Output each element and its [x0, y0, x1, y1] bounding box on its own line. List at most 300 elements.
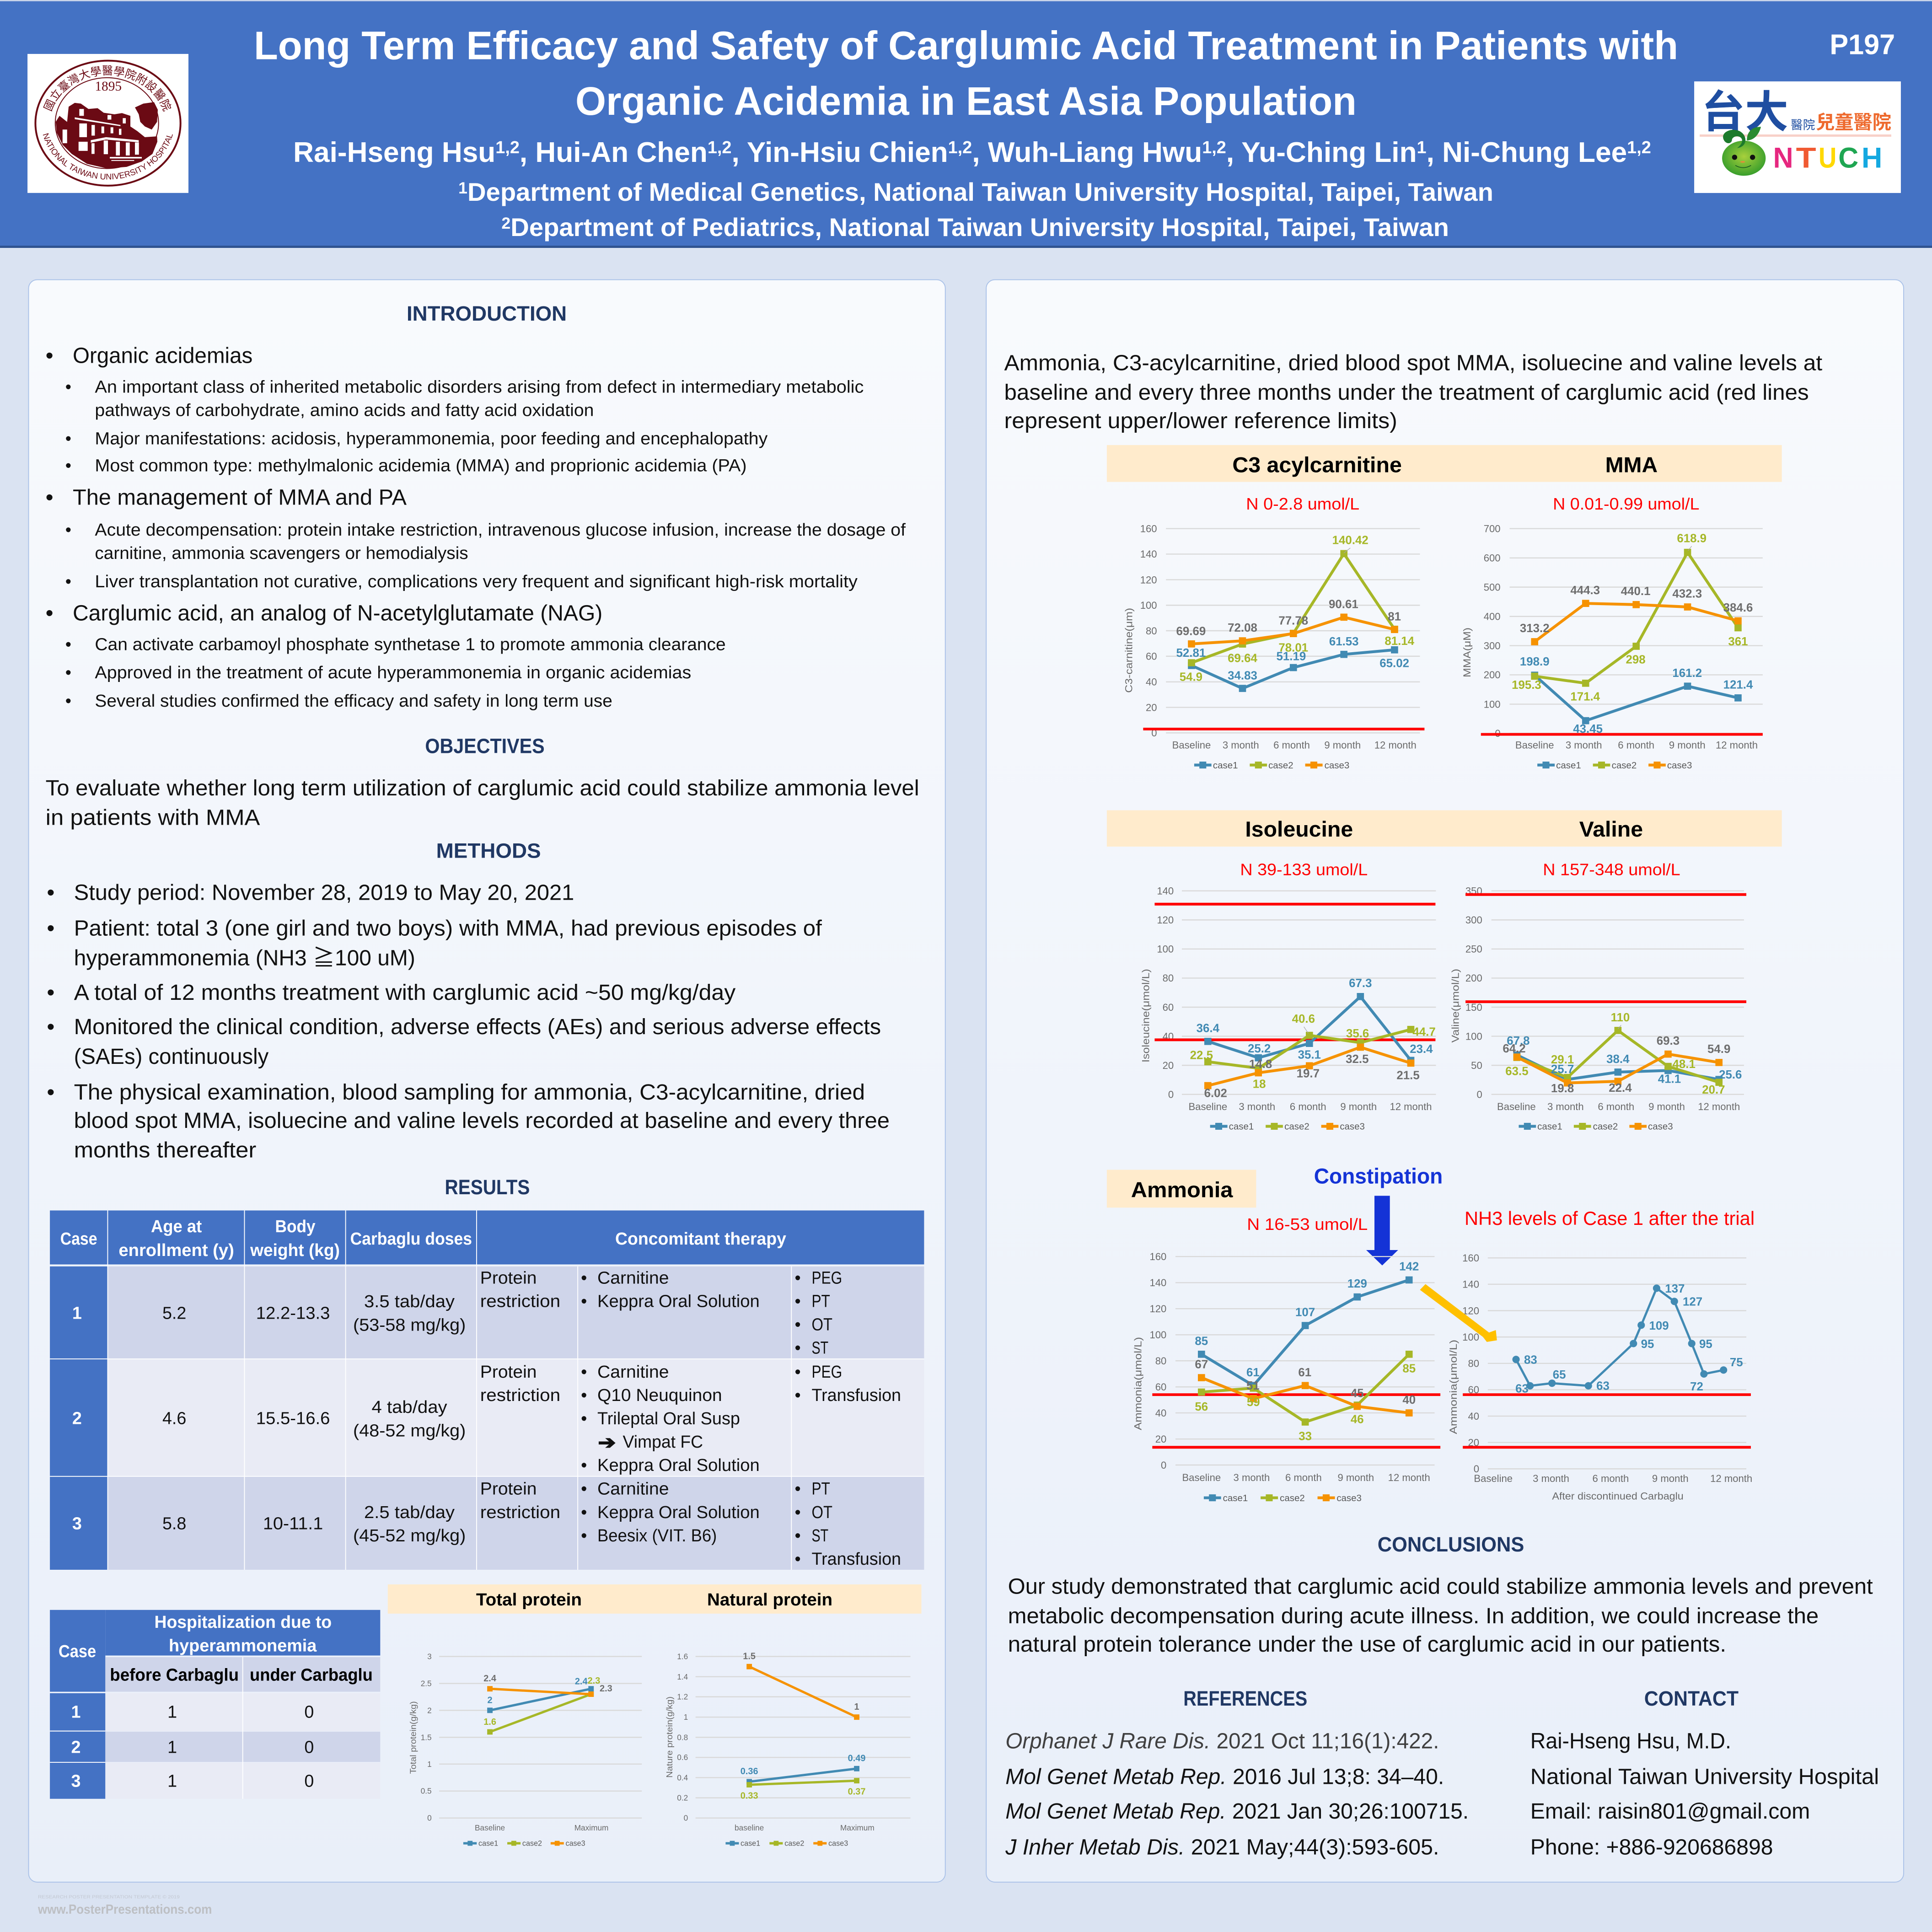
chart: MMA: 195.3 — [1512, 679, 1541, 692]
authors: , Hui-An Chen — [520, 137, 708, 168]
chart: C3 acylcarnitine: 20 — [1146, 702, 1157, 713]
chart: C3 acylcarnitine: 81 — [1388, 611, 1401, 623]
text block: methods bullets: • — [47, 916, 54, 941]
chart: NH3 of case 1 after the trial: 0 — [1474, 1463, 1479, 1475]
chart: C3 acylcarnitine: 90.61 — [1329, 598, 1358, 611]
chart: isoleucine: 80 — [1163, 972, 1174, 984]
chart: total protein — [408, 1652, 642, 1847]
chart: natural protein: 0.36 — [741, 1766, 758, 1776]
text block: methods bullets — [47, 880, 890, 1163]
chart: MMA: 440.1 — [1621, 585, 1650, 598]
band: ammonia: Ammonia — [1131, 1177, 1233, 1202]
chart: ammonia — [1132, 1251, 1440, 1503]
chart: valine: 110 — [1611, 1011, 1630, 1024]
chart: valine: 25.6 — [1719, 1068, 1742, 1081]
authors: , Wuh-Liang Hwu — [972, 137, 1202, 168]
chart: isoleucine: 3 month — [1239, 1101, 1275, 1112]
table row: case 3: • — [795, 1549, 801, 1568]
table: hospitalization due to hyperammonemia: under Carbaglu — [250, 1665, 373, 1684]
reference range: isoleucine: N 39-133 umol/L — [1240, 860, 1368, 879]
table row: case 2: Trileptal Oral Susp — [597, 1409, 740, 1428]
table: hospitalization due to hyperammonemia: Case — [59, 1642, 96, 1661]
table: hospitalization due to hyperammonemia: 0 — [304, 1702, 314, 1722]
reference range: valine: N 157-348 umol/L — [1543, 860, 1680, 879]
chart: ammonia: 6 month — [1285, 1472, 1322, 1483]
chart: MMA: 500 — [1484, 581, 1501, 593]
heading: contact: CONTACT — [1644, 1687, 1739, 1710]
chart: MMA: 171.4 — [1570, 691, 1600, 703]
text block: methods bullets: • — [47, 980, 54, 1005]
table row: case 2: ➔ — [598, 1431, 616, 1453]
text block: methods bullets: months thereafter — [74, 1138, 256, 1163]
affiliations: 1 — [458, 179, 467, 197]
chart: valine: 12 month — [1698, 1101, 1740, 1112]
chart: ammonia: 61 — [1298, 1366, 1311, 1379]
logo: NTUCH children's hospital: 醫院 — [1791, 118, 1815, 132]
chart: MMA: 700 — [1484, 523, 1501, 534]
table row: case 2: Carnitine — [597, 1362, 669, 1381]
table row: case 1: 5.2 — [162, 1303, 186, 1322]
chart: isoleucine: Isoleucine(μmol/L) — [1140, 969, 1152, 1063]
chart: ammonia: 9 month — [1337, 1472, 1374, 1483]
logo: National Taiwan University Hospital seal: NATIONAL TAIWAN UNIVERSITY HOSPITAL — [41, 132, 175, 182]
chart: C3 acylcarnitine: 3 month — [1223, 740, 1259, 751]
chart: MMA: 384.6 — [1723, 601, 1753, 614]
chart: C3 acylcarnitine: 160 — [1140, 523, 1157, 534]
logo: NTUCH children's hospital: 台大 — [1701, 88, 1788, 137]
chart: isoleucine: 18 — [1253, 1078, 1266, 1090]
chart: valine: 25.7 — [1551, 1063, 1574, 1076]
chart: valine: 250 — [1465, 944, 1482, 955]
chart: NH3 of case 1 after the trial: 9 month — [1652, 1473, 1689, 1484]
legend: case2 — [1280, 1493, 1305, 1503]
chart: total protein: 3 — [427, 1652, 432, 1661]
text block: introduction bullets: • — [46, 343, 54, 368]
table row: case 2: 15.5-16.6 — [256, 1408, 330, 1428]
table row: case 3: Carnitine — [597, 1479, 669, 1498]
chart: natural protein: 1 — [854, 1702, 859, 1712]
chart: natural protein: 1.2 — [677, 1692, 688, 1701]
legend: case1 — [1556, 760, 1581, 771]
chart: isoleucine: 35.1 — [1298, 1048, 1321, 1061]
footer template credit: www.PosterPresentations.com — [38, 1902, 212, 1916]
table row: case 3: • — [581, 1479, 587, 1498]
chart: MMA: MMA(μM) — [1461, 628, 1473, 677]
chart: ammonia: 33 — [1299, 1430, 1312, 1443]
chart: C3 acylcarnitine: 78.01 — [1278, 641, 1308, 654]
table row: case 1: (53-58 mg/kg) — [353, 1315, 466, 1335]
table: hospitalization due to hyperammonemia: 1 — [167, 1702, 177, 1722]
table row: case 1: Carnitine — [597, 1268, 669, 1287]
chart: MMA: 600 — [1484, 553, 1501, 564]
chart: valine: 9 month — [1648, 1101, 1685, 1112]
text block: introduction bullets: • — [65, 572, 71, 591]
table header: Age at — [151, 1217, 202, 1236]
chart: MMA: 400 — [1484, 611, 1501, 623]
text block: conclusions: Our study demonstrated that carglumic acid could stabilize ammonia levels and prevent — [1008, 1574, 1873, 1599]
chart: NH3 of case 1 after the trial: 160 — [1462, 1252, 1479, 1264]
chart: isoleucine: 120 — [1157, 914, 1174, 926]
chart: ammonia: 12 month — [1388, 1472, 1430, 1483]
table: hospitalization due to hyperammonemia: 1 — [167, 1737, 177, 1756]
table row: case 3: OT — [811, 1503, 832, 1522]
text block: introduction bullets: Organic acidemias — [73, 343, 252, 368]
table header: Case — [60, 1229, 97, 1248]
chart: total protein: 2.3 — [600, 1684, 612, 1694]
callout: constipation: Constipation — [1314, 1164, 1443, 1188]
chart: total protein: 2.3 — [588, 1676, 600, 1686]
chart: C3 acylcarnitine: 140.42 — [1332, 534, 1368, 547]
table row: case 2: Transfusion — [811, 1385, 901, 1405]
arrow: constipation marker — [1366, 1196, 1398, 1266]
legend: case2 — [1593, 1122, 1618, 1132]
band: total and natural protein: Total protein — [476, 1590, 582, 1609]
legend: case3 — [1325, 760, 1349, 771]
chart: ammonia: 67 — [1195, 1358, 1208, 1371]
chart: valine: 50 — [1471, 1060, 1482, 1071]
title: Organic Acidemia in East Asia Population — [575, 79, 1357, 123]
table: hospitalization due to hyperammonemia: 3 — [71, 1771, 80, 1790]
chart: MMA: 12 month — [1716, 740, 1758, 751]
band: isoleucine and valine: Valine — [1579, 817, 1643, 841]
table row: case 1: • — [795, 1315, 801, 1334]
reference range: ammonia: N 16-53 umol/L — [1247, 1215, 1368, 1234]
chart: natural protein: 0.4 — [677, 1773, 688, 1782]
legend: case2 — [1612, 760, 1637, 771]
band: C3 acylcarnitine and MMA — [1107, 445, 1782, 482]
chart: NH3 of case 1 after the trial: 60 — [1468, 1384, 1479, 1395]
text block: introduction bullets: • — [65, 691, 71, 710]
chart: valine: 54.9 — [1707, 1043, 1730, 1056]
text block: introduction bullets: • — [65, 520, 71, 539]
table row: case 3: • — [581, 1526, 587, 1545]
table row: case 3: • — [795, 1479, 801, 1498]
chart: valine: 41.1 — [1658, 1073, 1681, 1086]
text block: objectives: in patients with MMA — [46, 805, 260, 830]
chart: isoleucine: 67.3 — [1349, 977, 1372, 990]
chart: C3 acylcarnitine: 52.81 — [1176, 647, 1206, 660]
chart: C3 acylcarnitine: 69.64 — [1228, 652, 1257, 665]
chart: natural protein — [665, 1652, 911, 1847]
legend: case2 — [1268, 760, 1293, 771]
chart: MMA: 121.4 — [1723, 678, 1753, 691]
chart: ammonia: 20 — [1155, 1433, 1166, 1445]
chart: NH3 of case 1 after the trial: Baseline — [1474, 1473, 1513, 1484]
chart: MMA: 444.3 — [1570, 584, 1600, 597]
chart: natural protein: Nature protein(g/kg) — [665, 1696, 674, 1778]
table row: case 2: • — [581, 1385, 587, 1405]
table row: case 3: 10-11.1 — [263, 1514, 323, 1533]
text block: references: Mol Genet Metab Rep. 2016 Jul 13;8: 34–40. — [1005, 1765, 1444, 1789]
table row: case 2 — [72, 1362, 901, 1475]
chart: MMA: 618.9 — [1677, 532, 1707, 545]
affiliations: 2 — [501, 215, 510, 232]
chart: ammonia: 60 — [1155, 1381, 1166, 1393]
chart: isoleucine: 19.7 — [1297, 1068, 1320, 1080]
legend — [1537, 760, 1692, 771]
table row: case 3: 5.8 — [162, 1514, 186, 1533]
chart: ammonia: 45 — [1351, 1387, 1364, 1400]
chart: MMA: 361 — [1728, 635, 1748, 648]
table row: case 3: Beesix (VIT. B6) — [597, 1526, 717, 1545]
authors: 1,2 — [1627, 138, 1651, 157]
band: ammonia — [1107, 1170, 1256, 1208]
text block: introduction bullets: • — [65, 663, 71, 682]
reference range: C3: N 0-2.8 umol/L — [1246, 494, 1359, 513]
logo: NTUCH children's hospital: C — [1838, 142, 1858, 174]
chart: natural protein: 1.5 — [743, 1652, 756, 1662]
table row: case 2: • — [581, 1362, 587, 1381]
chart: MMA: 200 — [1484, 669, 1501, 681]
chart: isoleucine: 9 month — [1340, 1101, 1377, 1112]
text block: results lead-in: represent upper/lower reference limits) — [1004, 408, 1397, 433]
table: hospitalization due to hyperammonemia: 1 — [71, 1702, 80, 1722]
header banner — [0, 0, 1932, 248]
table row: case 2: Vimpat FC — [623, 1432, 703, 1451]
chart: C3 acylcarnitine: 61.53 — [1329, 635, 1359, 648]
authors: 1 — [1417, 138, 1427, 157]
chart: isoleucine: 44.7 — [1412, 1026, 1436, 1039]
table row: case 2: • — [795, 1362, 801, 1381]
legend: case1 — [1223, 1493, 1248, 1503]
authors: 1,2 — [708, 138, 731, 157]
text block: results lead-in — [1004, 351, 1823, 433]
chart: NH3 of case 1 after the trial: 75 — [1730, 1356, 1743, 1369]
chart: C3 acylcarnitine: 40 — [1146, 676, 1157, 688]
chart: valine: 0 — [1476, 1089, 1482, 1100]
poster number: P197 — [1830, 29, 1895, 61]
text block: introduction bullets: The management of MMA and PA — [73, 485, 407, 510]
chart: NH3 of case 1 after the trial: 63 — [1515, 1383, 1529, 1395]
table row: case 2: Q10 Neuquinon — [597, 1385, 722, 1405]
chart: total protein: 1 — [427, 1760, 432, 1769]
chart: ammonia: 140 — [1149, 1277, 1166, 1288]
legend: case1 — [1213, 760, 1238, 771]
text block: methods bullets: hyperammonemia (NH3 ≧100 uM) — [74, 945, 415, 970]
chart: natural protein: 0.2 — [677, 1793, 688, 1803]
legend: case3 — [1336, 1493, 1362, 1503]
authors: 1,2 — [495, 138, 520, 157]
text block: contact — [1530, 1729, 1879, 1859]
band: isoleucine and valine — [1107, 810, 1782, 847]
text block: methods bullets: Patient: total 3 (one girl and two boys) with MMA, had previous episodes of — [74, 916, 822, 941]
table: hospitalization due to hyperammonemia: 1 — [167, 1771, 177, 1790]
chart: natural protein: Maximum — [840, 1823, 875, 1832]
chart: NH3 of case 1 after the trial: 80 — [1468, 1358, 1479, 1369]
chart: C3 acylcarnitine: Baseline — [1172, 740, 1211, 751]
text block: conclusions: natural protein tolerance under the use of carglumic acid in our patients. — [1008, 1632, 1726, 1657]
table row: case 1: PEG — [811, 1268, 842, 1287]
table: hospitalization due to hyperammonemia — [50, 1610, 380, 1799]
chart: isoleucine: 20 — [1163, 1060, 1174, 1071]
chart: valine: 64.2 — [1503, 1042, 1526, 1055]
text block: references — [1005, 1729, 1469, 1859]
table: hospitalization due to hyperammonemia: Hospitalization due to — [155, 1612, 332, 1631]
table row: case 1: 3.5 tab/day — [364, 1292, 455, 1311]
logo: NTUCH children's hospital: H — [1862, 142, 1882, 174]
affiliations: Department of Pediatrics, National Taiwan University Hospital, Taipei, Taiwan — [510, 213, 1449, 242]
chart: NH3 of case 1 after the trial: 127 — [1683, 1296, 1702, 1309]
legend: case3 — [828, 1839, 848, 1847]
table row: case 1: 12.2-13.3 — [256, 1303, 330, 1322]
chart: NH3 of case 1 after the trial: 40 — [1468, 1411, 1479, 1422]
table row: case 3: Keppra Oral Solution — [597, 1503, 760, 1522]
heading: objectives: OBJECTIVES — [425, 734, 545, 757]
chart: isoleucine: 0 — [1168, 1089, 1174, 1100]
caption: NH3 levels after trial: NH3 levels of Case 1 after the trial — [1465, 1208, 1755, 1229]
text block: contact: Phone: +886-920686898 — [1530, 1835, 1773, 1859]
chart: valine: 6 month — [1598, 1101, 1634, 1112]
text block: introduction bullets: pathways of carbohydrate, amino acids and fatty acid oxidation — [95, 400, 594, 419]
table row: case 2: • — [581, 1409, 587, 1428]
chart: NH3 of case 1 after the trial: 20 — [1468, 1437, 1479, 1449]
chart: C3 acylcarnitine: 81.14 — [1385, 635, 1415, 648]
chart: ammonia: 85 — [1195, 1335, 1208, 1348]
table row: case 3: PT — [811, 1479, 830, 1498]
text block: results lead-in: baseline and every three months under the treatment of carglumic acid (red lines — [1004, 380, 1809, 405]
legend: case1 — [478, 1839, 498, 1847]
arrow: yellow link to post-trial chart — [1420, 1284, 1497, 1342]
table row: case 2: • — [795, 1385, 801, 1405]
table row: case 1: • — [795, 1268, 801, 1287]
heading: results: RESULTS — [445, 1175, 530, 1199]
chart: natural protein: 0.49 — [848, 1753, 865, 1763]
legend: case3 — [565, 1839, 585, 1847]
text block: introduction bullets: • — [46, 601, 54, 626]
logo: National Taiwan University Hospital seal: 國立臺灣大學醫學院附設醫院 — [42, 65, 173, 113]
chart: isoleucine: 36.4 — [1197, 1022, 1220, 1035]
table row: case 2: 2 — [72, 1408, 82, 1428]
table row: case 1: OT — [811, 1315, 832, 1334]
table row: case 1: • — [581, 1268, 587, 1287]
chart: MMA — [1461, 523, 1763, 771]
chart: valine — [1449, 885, 1746, 1132]
chart: NH3 of case 1 after the trial: 65 — [1553, 1368, 1566, 1381]
chart: ammonia: Baseline — [1182, 1472, 1221, 1483]
chart: NH3 of case 1 after the trial: 83 — [1524, 1354, 1537, 1367]
chart: total protein: Baseline — [475, 1823, 505, 1832]
chart: ammonia: 46 — [1351, 1413, 1364, 1426]
table row: case 1: restriction — [480, 1292, 560, 1311]
table row: case 3: Protein — [480, 1479, 537, 1498]
chart: ammonia: 61 — [1246, 1366, 1260, 1379]
legend: case2 — [1284, 1122, 1309, 1132]
footer template credit — [38, 1895, 212, 1916]
chart: C3 acylcarnitine: 51.19 — [1277, 650, 1306, 663]
chart: ammonia: 56 — [1195, 1401, 1208, 1413]
chart: C3 acylcarnitine: 140 — [1140, 548, 1157, 560]
chart: MMA: 0 — [1495, 728, 1501, 739]
text block: conclusions — [1008, 1574, 1873, 1657]
table header — [60, 1217, 786, 1260]
chart: MMA: 300 — [1484, 640, 1501, 651]
chart: total protein: Maximum — [574, 1823, 608, 1832]
chart: isoleucine: 23.4 — [1410, 1043, 1433, 1056]
chart: MMA: 100 — [1484, 698, 1501, 710]
legend — [725, 1839, 848, 1847]
chart: valine: 19.8 — [1551, 1082, 1574, 1095]
chart: C3 acylcarnitine: 9 month — [1324, 740, 1361, 751]
table row: case 3: Transfusion — [811, 1549, 901, 1568]
table row: case 2: 4 tab/day — [371, 1397, 447, 1417]
chart: valine: 29.1 — [1551, 1053, 1574, 1066]
text block: contact: Email: raisin801@gmail.com — [1530, 1799, 1810, 1824]
text block: objectives: To evaluate whether long term utilization of carglumic acid could stabilize ammonia level — [46, 776, 919, 800]
title — [254, 23, 1678, 123]
chart: MMA: 6 month — [1618, 740, 1654, 751]
table row: case 1: • — [795, 1292, 801, 1311]
text block: methods bullets: • — [47, 1014, 54, 1039]
table row: case 1: 1 — [72, 1303, 82, 1322]
table row: case 1: • — [795, 1338, 801, 1357]
legend — [1204, 1493, 1362, 1503]
chart: ammonia: 120 — [1149, 1303, 1166, 1315]
logo: NTUCH children's hospital — [1694, 81, 1901, 193]
table: hospitalization due to hyperammonemia: 0 — [304, 1771, 314, 1790]
chart: C3 acylcarnitine — [1123, 523, 1424, 771]
chart: valine: 48.1 — [1673, 1058, 1696, 1071]
text block: introduction bullets — [46, 343, 906, 710]
chart: isoleucine: 6 month — [1290, 1101, 1326, 1112]
chart: valine: Baseline — [1497, 1101, 1536, 1112]
text block: methods bullets: Study period: November 28, 2019 to May 20, 2021 — [74, 880, 574, 905]
table row: case 3: (45-52 mg/kg) — [353, 1526, 466, 1545]
table header: enrollment (y) — [118, 1240, 234, 1260]
footer template credit: RESEARCH POSTER PRESENTATION TEMPLATE © 2019 — [38, 1895, 180, 1900]
chart: natural protein: 1.6 — [677, 1652, 688, 1661]
chart: ammonia: 129 — [1347, 1277, 1367, 1290]
text block: methods bullets: The physical examination, blood sampling for ammonia, C3-acylcarnitine, dried — [74, 1080, 865, 1105]
chart: ammonia: 59 — [1247, 1396, 1260, 1409]
chart: isoleucine: 32.5 — [1346, 1053, 1368, 1066]
chart: ammonia: 85 — [1402, 1362, 1416, 1375]
chart: ammonia: 142 — [1399, 1261, 1419, 1273]
table row: case 3: • — [795, 1526, 801, 1545]
logo: NTUCH children's hospital: T — [1796, 142, 1816, 174]
chart: MMA: 313.2 — [1520, 622, 1550, 635]
text block: introduction bullets: Several studies confirmed the efficacy and safety in long term use — [95, 691, 612, 710]
chart: total protein: 1.5 — [421, 1733, 432, 1742]
table row: case 2: • — [581, 1455, 587, 1475]
chart: MMA: 9 month — [1669, 740, 1706, 751]
table row: case 3: 2.5 tab/day — [364, 1503, 455, 1522]
chart: natural protein: 0.37 — [848, 1787, 865, 1797]
table header: Body — [275, 1217, 316, 1236]
band: total and natural protein: Natural protein — [707, 1590, 832, 1609]
chart: total protein: 2 — [427, 1706, 432, 1715]
reference range: MMA: N 0.01-0.99 umol/L — [1553, 494, 1699, 513]
table row: case 1: • — [581, 1292, 587, 1311]
chart: isoleucine: 35.6 — [1346, 1027, 1369, 1040]
chart: valine: 350 — [1465, 885, 1482, 896]
chart: valine: 3 month — [1547, 1101, 1584, 1112]
chart: natural protein: 0.33 — [741, 1791, 758, 1801]
legend: case1 — [1537, 1122, 1562, 1132]
chart: valine: 100 — [1465, 1030, 1482, 1042]
chart: total protein: 2.4 — [575, 1676, 588, 1686]
heading: conclusions: CONCLUSIONS — [1378, 1533, 1524, 1556]
chart: total protein: 2 — [488, 1696, 493, 1706]
chart: isoleucine: Baseline — [1188, 1101, 1227, 1112]
chart: C3 acylcarnitine: 100 — [1140, 600, 1157, 611]
chart: isoleucine: 40.6 — [1292, 1013, 1315, 1025]
legend — [1519, 1122, 1673, 1132]
chart: NH3 of case 1 after the trial — [1448, 1252, 1752, 1502]
chart: NH3 of case 1 after the trial: Ammonia(μmol/L) — [1448, 1340, 1459, 1434]
chart: ammonia: 40 — [1155, 1407, 1166, 1419]
chart: isoleucine: 12 month — [1390, 1101, 1432, 1112]
text block: introduction bullets: Most common type: methylmalonic acidemia (MMA) and proprionic acidemia (PA) — [95, 456, 746, 475]
